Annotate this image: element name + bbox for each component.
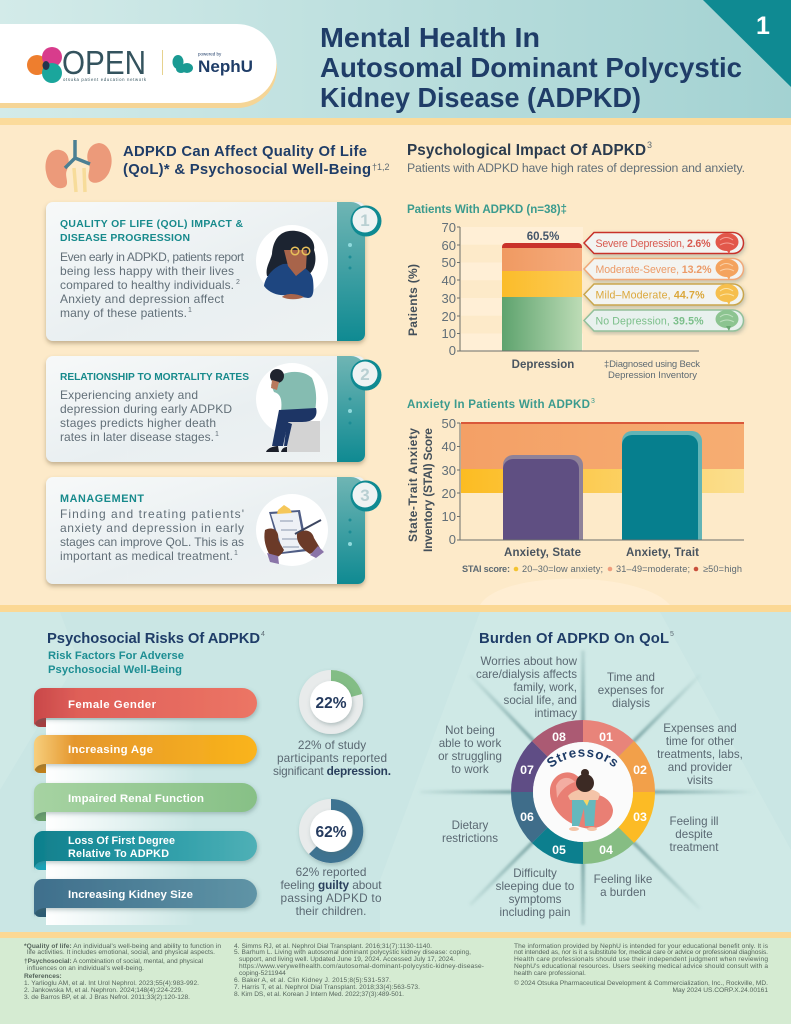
label 02: time for other xyxy=(666,735,734,748)
bar: anxiety state xyxy=(503,455,583,540)
label 08: care/dialysis affects xyxy=(476,668,577,681)
STAI legend: 20–30=low anxiety; xyxy=(522,564,603,574)
label 07: or struggling xyxy=(438,750,502,763)
label 04: a burden xyxy=(600,886,646,899)
callout: no depression: No Depression, 39.5% xyxy=(596,316,704,328)
card 1 heading: DISEASE PROGRESSION xyxy=(60,233,190,244)
references continued: 4. Simms RJ, et al. Nephrol Dial Transplant. 2016;31(7):1130-1140. xyxy=(234,943,432,950)
logo pill xyxy=(0,24,277,108)
disclaimer: © 2024 Otsuka Pharmaceutical Development & Commercialization, Inc., Rockville, MD. xyxy=(514,979,768,987)
progress dots 1 xyxy=(348,243,352,270)
header background xyxy=(0,0,791,118)
icon: red brain xyxy=(716,233,738,254)
card 2 body xyxy=(60,388,232,444)
icon: woman with glasses xyxy=(256,225,328,299)
label 05 xyxy=(496,867,574,919)
badge 1 xyxy=(350,206,382,236)
label 02: Expenses and xyxy=(663,722,737,735)
light background shape xyxy=(0,584,791,933)
donut: 62 percent: 62% xyxy=(315,824,347,841)
label 02: visits xyxy=(687,774,713,787)
x axis label: Depression xyxy=(512,359,574,371)
card 1 body: compared to healthy individuals. xyxy=(60,278,234,292)
y axis ticks xyxy=(442,416,456,547)
logo divider xyxy=(162,50,163,75)
callout: severe depression xyxy=(584,232,744,254)
label 01: expenses for xyxy=(598,684,664,697)
card 1 heading: QUALITY OF LIFE (QOL) IMPACT & xyxy=(60,219,243,230)
badge 3 xyxy=(350,480,382,512)
label 01: dialysis xyxy=(612,697,650,710)
references continued: 5. Barhum L. Living with autosomal dominant polycystic kidney disease: coping, xyxy=(234,949,471,956)
heading: quality of life: (QoL)* & Psychosocial Well-Being xyxy=(123,162,371,178)
y axis title: Patients (%) xyxy=(406,264,420,336)
segment 05 xyxy=(532,827,583,864)
panel: card 3 management xyxy=(46,477,382,584)
callout: mild-moderate xyxy=(584,284,744,305)
stat text: 22 percent: 22% of study xyxy=(298,738,366,752)
card 3 body xyxy=(60,507,244,563)
card 2 heading: RELATIONSHIP TO MORTALITY RATES xyxy=(60,372,249,383)
stat text: 62 percent: feeling guilty about xyxy=(280,878,382,892)
decorative spokes xyxy=(420,650,755,925)
icon: person on heart xyxy=(550,769,613,831)
stat text: 62 percent xyxy=(280,865,382,918)
ribbon: loss of first degree relative: Loss Of First Degree xyxy=(68,835,175,847)
disclaimer: NephU's educational resources. Users seeking medical advice should consult with a xyxy=(514,963,768,970)
ribbon backing column xyxy=(46,720,196,925)
ribbon: increasing age: Increasing Age xyxy=(68,744,153,756)
disclaimer: health care professional. xyxy=(514,970,586,977)
footnote xyxy=(604,359,700,381)
stat text: 22 percent: significant depression. xyxy=(273,764,391,778)
heading: quality of life: †1,2 xyxy=(372,162,390,172)
bar value: 60.5% xyxy=(527,231,559,243)
label 01: Time and xyxy=(607,671,655,684)
icon: yellow brain xyxy=(716,284,738,305)
card 2 body: depression during early ADPKD xyxy=(60,402,232,416)
progress dots 3 xyxy=(348,518,352,546)
heading: psychosocial risks: Psychosocial Risks Of ADPKD xyxy=(47,631,260,647)
icon: person sitting xyxy=(256,363,328,452)
alternating chart bands xyxy=(461,227,583,351)
label 03: despite xyxy=(675,828,713,841)
score bands xyxy=(461,422,744,493)
references continued xyxy=(234,943,484,998)
label 06 xyxy=(442,819,498,845)
x axis labels: Anxiety, Trait xyxy=(626,547,699,559)
label 07 xyxy=(438,724,502,776)
label 03: Feeling ill xyxy=(670,815,718,828)
label 07: to work xyxy=(451,763,489,776)
donut: 62 percent xyxy=(299,799,363,863)
footnotes: definitions and references: References: xyxy=(24,973,62,980)
segment 01 xyxy=(583,720,634,757)
ribbon: loss of first degree relative xyxy=(34,831,257,870)
chart: depression stacked bar xyxy=(406,220,744,381)
segment 08 xyxy=(532,720,583,757)
icon: NephU logo xyxy=(172,55,193,73)
segment 07 xyxy=(511,741,548,792)
center circle xyxy=(533,742,633,842)
OPEN wordmark: OPEN xyxy=(62,44,146,81)
label 08: family, work, xyxy=(513,681,577,694)
powered by text: powered by xyxy=(198,52,222,56)
y axis ticks: 20 xyxy=(442,309,456,324)
card 3 body: stages can improve QoL. This is as xyxy=(60,535,244,549)
references continued: 7. Harris T, et al. Nephrol Dial Transplant. 2018;33(4):563-573. xyxy=(234,984,420,991)
footnotes: definitions and references: influences on an individual's well-being. xyxy=(27,965,144,972)
segment 02 xyxy=(618,741,655,792)
ribbon: loss of first degree relative: Relative To ADPKD xyxy=(68,848,169,860)
yellow header stripe xyxy=(0,118,791,125)
footnotes: definitions and references: life activities. It includes emotional, social, and physical aspects. xyxy=(27,949,215,956)
label 04 xyxy=(594,873,652,899)
card 2 teal strip xyxy=(337,356,365,462)
segment numbers: 03 xyxy=(633,810,647,824)
heading: psychological impact: Psychological Impact Of ADPKD xyxy=(407,142,646,159)
references continued: coping-5211944 xyxy=(239,970,286,977)
footnotes: definitions and references xyxy=(24,943,221,1001)
ribbon: female gender: Female Gender xyxy=(68,699,157,711)
stat text: 22 percent: participants reported xyxy=(277,751,387,765)
icon: hands with clipboard xyxy=(256,494,328,566)
disclaimer: May 2024 US.CORP.X.24.00161 xyxy=(672,987,768,994)
curved label: Stressors xyxy=(547,749,618,767)
icon: kidneys xyxy=(46,140,112,192)
yellow footer stripe xyxy=(0,932,791,938)
y axis title: Inventory (STAI) Score xyxy=(421,428,435,552)
footnotes: definitions and references: 1. Yarlioglu AM, et al. Int Urol Nephrol. 2023;55(4):983-992. xyxy=(24,980,199,987)
label 05: Difficulty xyxy=(513,867,557,880)
disclaimer: The information provided by NephU is intended for your educational benefit only. It is xyxy=(514,943,769,950)
logo tagline: otsuka patient education network xyxy=(63,77,147,82)
label 07: able to work xyxy=(439,737,501,750)
segment numbers: 06 xyxy=(520,810,534,824)
callout: no depression xyxy=(584,310,744,331)
teal lower section background xyxy=(0,605,791,933)
y axis ticks: 40 xyxy=(442,273,456,288)
label 05: symptoms xyxy=(509,893,562,906)
y axis ticks: 30 xyxy=(442,291,456,306)
card 1 body: Even early in ADPKD, patients report xyxy=(60,250,245,264)
heading: quality of life xyxy=(123,144,390,178)
label 08: intimacy xyxy=(534,707,577,720)
title xyxy=(320,22,742,113)
card 1 body xyxy=(60,250,245,320)
title: Autosomal Dominant Polycystic xyxy=(320,52,742,83)
y axis ticks: 70 xyxy=(442,220,456,235)
STAI legend: 31–49=moderate; xyxy=(616,564,690,574)
y axis ticks: 60 xyxy=(442,238,456,253)
card 2 body: Experiencing anxiety and xyxy=(60,388,198,402)
cream panel background xyxy=(0,118,791,605)
NephU wordmark: NephU xyxy=(198,57,253,76)
references continued: support, and living well. Updated June 19, 2024. Accessed July 17, 2024. xyxy=(239,956,455,963)
subheading: risk factors: Psychosocial Well-Being xyxy=(48,664,182,676)
card 3 body: Finding and treating patients' xyxy=(60,507,244,521)
card 3 body: 1 xyxy=(234,550,238,557)
footnotes: definitions and references: 3. de Barros BP, et al. J Bras Nefrol. 2011;33(2):120-128. xyxy=(24,994,190,1001)
label 03 xyxy=(670,815,719,854)
badge 2 xyxy=(350,360,382,390)
y axis ticks: 50 xyxy=(442,416,456,431)
ribbon: impaired renal function: Impaired Renal Function xyxy=(68,793,204,805)
label 08: social life, and xyxy=(504,694,577,707)
references continued: 6. Baker A, et al. Clin Kidney J. 2015;8(5):531-537. xyxy=(234,977,391,984)
chart: anxiety bars xyxy=(406,416,744,574)
label 02: and provider xyxy=(668,761,732,774)
label 08 xyxy=(476,655,578,720)
segment numbers: 01 xyxy=(599,730,613,744)
depression bar xyxy=(502,243,582,351)
subheading: risk factors xyxy=(48,650,184,676)
segment numbers: 04 xyxy=(599,843,613,857)
footnotes: definitions and references: *Quality of life: An individual's well-being and ability to function in xyxy=(24,943,221,950)
references continued: https://www.verywellhealth.com/autosomal-dominant-polycystic-kidney-disease- xyxy=(239,963,484,970)
footnotes: definitions and references: 2. Jankowska M, et al. Nephron. 2024;148(4):224-229. xyxy=(24,987,183,994)
labels: stressors xyxy=(438,655,743,919)
ribbon: female gender xyxy=(34,688,257,727)
callout: moderate-severe xyxy=(584,258,744,280)
card 2 body: stages predicts higher death xyxy=(60,416,216,430)
heading: psychosocial risks: 4 xyxy=(261,631,265,638)
x axis labels xyxy=(504,547,699,559)
label 05: including pain xyxy=(500,906,570,919)
panel: card 2 mortality xyxy=(46,356,382,462)
card 3 body: important as medical treatment. xyxy=(60,549,233,563)
callout: mild-moderate: Mild–Moderate, 44.7% xyxy=(596,290,705,302)
panel: risk factor ribbons xyxy=(34,688,257,925)
page number corner xyxy=(703,0,791,87)
y axis ticks: 10 xyxy=(442,509,456,524)
callout: moderate-severe: Moderate-Severe, 13.2% xyxy=(596,264,712,276)
donut: 22 percent xyxy=(299,670,363,734)
cream light blob xyxy=(480,579,670,605)
y axis ticks: 0 xyxy=(449,343,456,358)
label 04: Feeling like xyxy=(594,873,652,886)
segment 06 xyxy=(511,792,548,843)
segment 03 xyxy=(618,792,655,843)
chart heading: patients with ADPKD: Patients With ADPKD (n=38)‡ xyxy=(407,203,567,216)
disclaimer xyxy=(514,943,769,994)
chart: stressors wheel xyxy=(511,720,655,864)
y axis title: State-Trait Anxiety xyxy=(406,428,420,542)
panel: card 1 QoL impact xyxy=(46,202,382,341)
ribbon: increasing kidney size xyxy=(34,879,257,917)
disclaimer: Health care professionals should use their independent judgment when reviewing xyxy=(514,956,768,963)
bar: anxiety trait xyxy=(622,431,702,540)
y axis ticks: 0 xyxy=(449,532,456,547)
icon: green brain xyxy=(716,310,738,331)
card 2 body: 1 xyxy=(215,431,219,438)
stat text: 62 percent: their children. xyxy=(296,904,366,918)
segment numbers: 02 xyxy=(633,763,647,777)
title: Mental Health In xyxy=(320,22,540,53)
STAI legend xyxy=(462,564,742,574)
y axis ticks xyxy=(442,220,456,358)
heading: burden: Burden Of ADPKD On QoL xyxy=(479,631,669,647)
stat text: 62 percent: 62% reported xyxy=(296,865,366,879)
disclaimer: not intended as, nor is it a substitute for, medical care or advice or professional diagnosis. xyxy=(514,949,768,956)
card 3 heading: MANAGEMENT xyxy=(60,493,144,505)
references continued: 8. Kim DS, et al. Korean J Intern Med. 2022;37(3):489-501. xyxy=(234,991,404,998)
label 08: Worries about how xyxy=(481,655,578,668)
label 05: sleeping due to xyxy=(496,880,574,893)
footnote: ‡Diagnosed using Beck xyxy=(604,359,700,370)
title: Kidney Disease (ADPKD) xyxy=(320,82,641,113)
label 02: treatments, labs, xyxy=(657,748,743,761)
ribbon: impaired renal function xyxy=(34,783,257,821)
STAI legend: STAI score: xyxy=(462,564,510,574)
axis lines xyxy=(457,227,699,351)
card 1 body: many of these patients. xyxy=(60,306,187,320)
label 06: restrictions xyxy=(442,832,498,845)
icon: orange brain xyxy=(716,259,738,280)
chart heading: anxiety: Anxiety In Patients With ADPKD xyxy=(407,398,590,411)
card 2 body: rates in later disease stages. xyxy=(60,430,214,444)
label 06: Dietary xyxy=(452,819,489,832)
x axis labels: Anxiety, State xyxy=(504,547,581,559)
card 1 body: being less happy with their lives xyxy=(60,264,234,278)
footer background xyxy=(0,933,791,1024)
stat text: 62 percent: passing ADPKD to xyxy=(280,891,382,905)
STAI legend: ≥50=high xyxy=(703,564,742,574)
ribbon: increasing kidney size: Increasing Kidney Size xyxy=(68,889,193,901)
y axis ticks: 20 xyxy=(442,486,456,501)
donut: 22 percent: 22% xyxy=(315,695,347,712)
heading: quality of life: ADPKD Can Affect Quality Of Life xyxy=(123,144,367,160)
card 3 body: anxiety and depression in early xyxy=(60,521,244,535)
badge 3: 3 xyxy=(360,486,370,505)
card 1 body: Anxiety and depression affect xyxy=(60,292,225,306)
page number corner: 1 xyxy=(756,12,770,40)
y axis ticks: 10 xyxy=(442,326,456,341)
segment 04 xyxy=(583,827,634,864)
label 03: treatment xyxy=(670,841,719,854)
footnote: Depression Inventory xyxy=(608,370,697,381)
heading: psychological impact: 3 xyxy=(647,140,652,150)
heading: burden: 5 xyxy=(670,631,674,638)
ribbon: increasing age xyxy=(34,735,257,773)
label 01 xyxy=(598,671,664,710)
card 1 heading xyxy=(60,219,243,244)
footnotes: definitions and references: †Psychosocial: A combination of social, mental, and physical xyxy=(24,958,204,965)
icon: OPEN logo circles xyxy=(27,47,62,83)
segment numbers: 07 xyxy=(520,763,534,777)
y axis ticks: 30 xyxy=(442,463,456,478)
chart heading: anxiety: 3 xyxy=(591,398,595,405)
callout: severe depression: Severe Depression, 2.6% xyxy=(596,238,711,250)
progress dots 2 xyxy=(348,398,352,424)
subheading: risk factors: Risk Factors For Adverse xyxy=(48,650,184,662)
card 3 teal strip xyxy=(337,477,365,584)
label 02 xyxy=(657,722,743,787)
badge 1: 1 xyxy=(360,211,370,230)
axis lines xyxy=(457,423,744,540)
label 07: Not being xyxy=(445,724,495,737)
intro text: Patients with ADPKD have high rates of depression and anxiety. xyxy=(407,161,745,175)
card 1 body: 1 xyxy=(188,307,192,314)
card 1 teal strip xyxy=(337,202,365,341)
badge 2: 2 xyxy=(360,365,370,384)
y axis title xyxy=(406,428,435,552)
yellow section stripe xyxy=(0,605,791,612)
y axis ticks: 50 xyxy=(442,255,456,270)
y axis ticks: 40 xyxy=(442,439,456,454)
card 1 body: 2 xyxy=(236,279,240,286)
stat text: 22 percent xyxy=(273,738,391,778)
segment numbers: 08 xyxy=(552,730,566,744)
segment numbers: 05 xyxy=(552,843,566,857)
segment numbers xyxy=(520,730,647,857)
